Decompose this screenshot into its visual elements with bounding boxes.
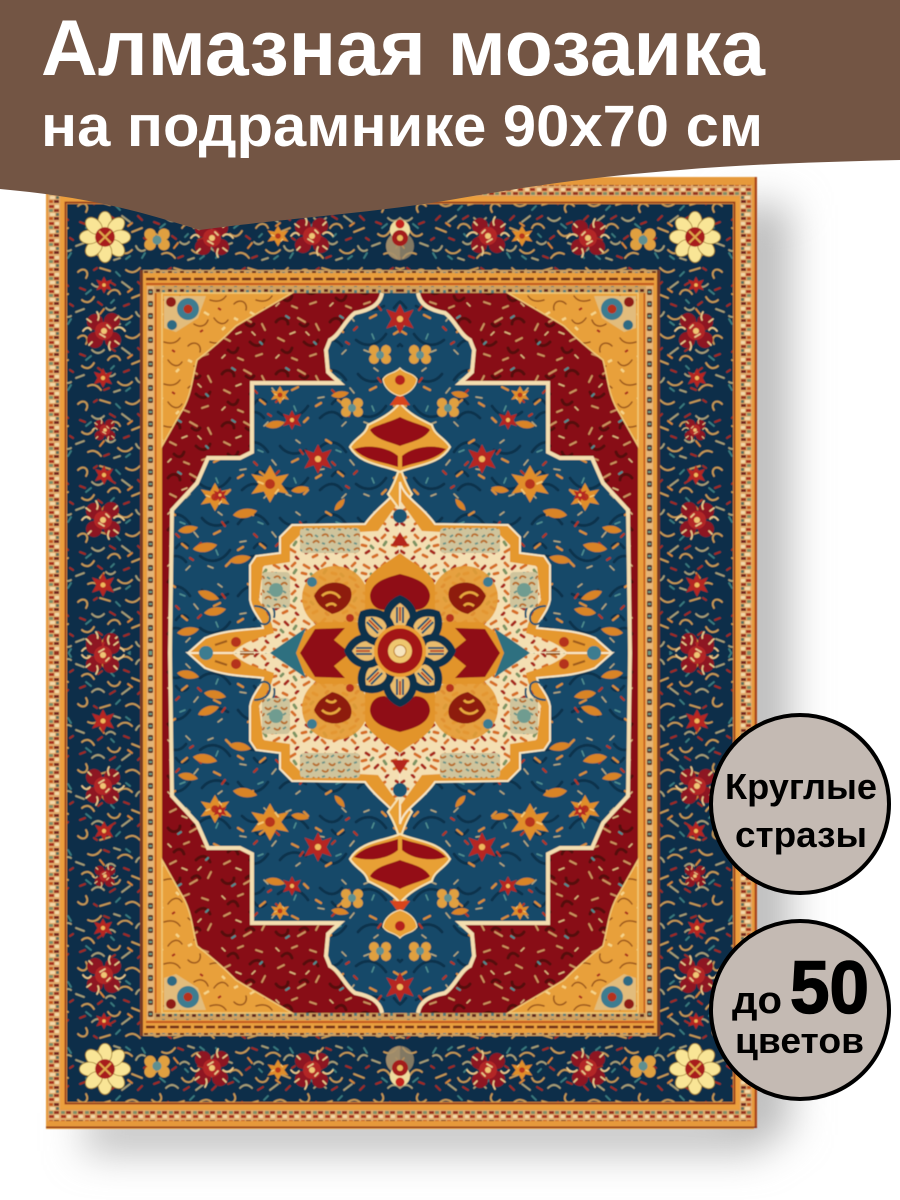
icon: red border flowers (82, 217, 333, 670)
diamond mosaic carpet picture (46, 177, 757, 1129)
icon: red field flowers (214, 304, 414, 502)
icon: gold field flowers (341, 345, 391, 417)
medallion flower quadrant (302, 566, 368, 630)
medallion red lobes (300, 574, 430, 678)
carpet canvas base (46, 177, 757, 1128)
carpet top-left quarter (46, 177, 450, 684)
gold corner spandrel (162, 293, 292, 446)
pendant neck (388, 466, 412, 510)
carpet top-right quarter (350, 177, 754, 684)
navy floral border band (67, 204, 400, 653)
badge: round rhinestones: стразы (735, 814, 867, 855)
badge: up to 50 colors: до (732, 980, 782, 1022)
title: Алмазная мозаика (41, 3, 766, 92)
cream field outline (170, 293, 382, 653)
badge: up to 50 colors: цветов (735, 1020, 864, 1061)
gold inner frame (140, 270, 400, 653)
carpet right edge (755, 177, 757, 1128)
pendant finial (383, 368, 417, 405)
upper pendant (350, 368, 450, 510)
rosette core (374, 625, 426, 677)
icon: medallion top gem (391, 509, 409, 546)
field flowers (177, 304, 414, 636)
badge: round rhinestones (711, 715, 889, 893)
medallion notch scroll (254, 600, 275, 624)
icon: small border flowers (92, 226, 288, 597)
carpet bottom-right quarter (350, 622, 754, 1129)
icon: yellow corner flower (80, 212, 130, 262)
badge: up to 50 colors: 50 (790, 946, 869, 1029)
carpet bottom edge (46, 1126, 757, 1128)
outer patterned strip (46, 177, 400, 653)
carpet bottom-left quarter (46, 622, 450, 1129)
icon: corner teal flower (164, 296, 206, 332)
canvas drop shadow (85, 205, 790, 1152)
medallion cream ground (232, 500, 400, 653)
blue medallion field (170, 293, 400, 653)
badge: round rhinestones: Круглые (725, 766, 877, 807)
pendant red inlays (354, 417, 446, 467)
medallion teal slit (270, 628, 306, 678)
medallion sage panels (262, 528, 360, 608)
badge: up to 50 colors (711, 921, 889, 1099)
icon: orange field flowers (201, 386, 289, 511)
medallion tip inlay (199, 637, 254, 660)
red field (162, 293, 400, 653)
center rosette (344, 595, 456, 707)
icon: orange field leaves (177, 391, 349, 636)
rosette navy ground (362, 613, 438, 689)
subtitle: на подрамнике 90х70 см (41, 94, 763, 159)
brown title banner (0, 0, 900, 230)
central medallion outline (188, 482, 400, 653)
medallion gold lobes (284, 553, 435, 684)
rosette petals (344, 595, 456, 707)
border flowers (80, 212, 414, 670)
pendant body (350, 403, 450, 472)
icon: top center ornament (386, 220, 414, 260)
